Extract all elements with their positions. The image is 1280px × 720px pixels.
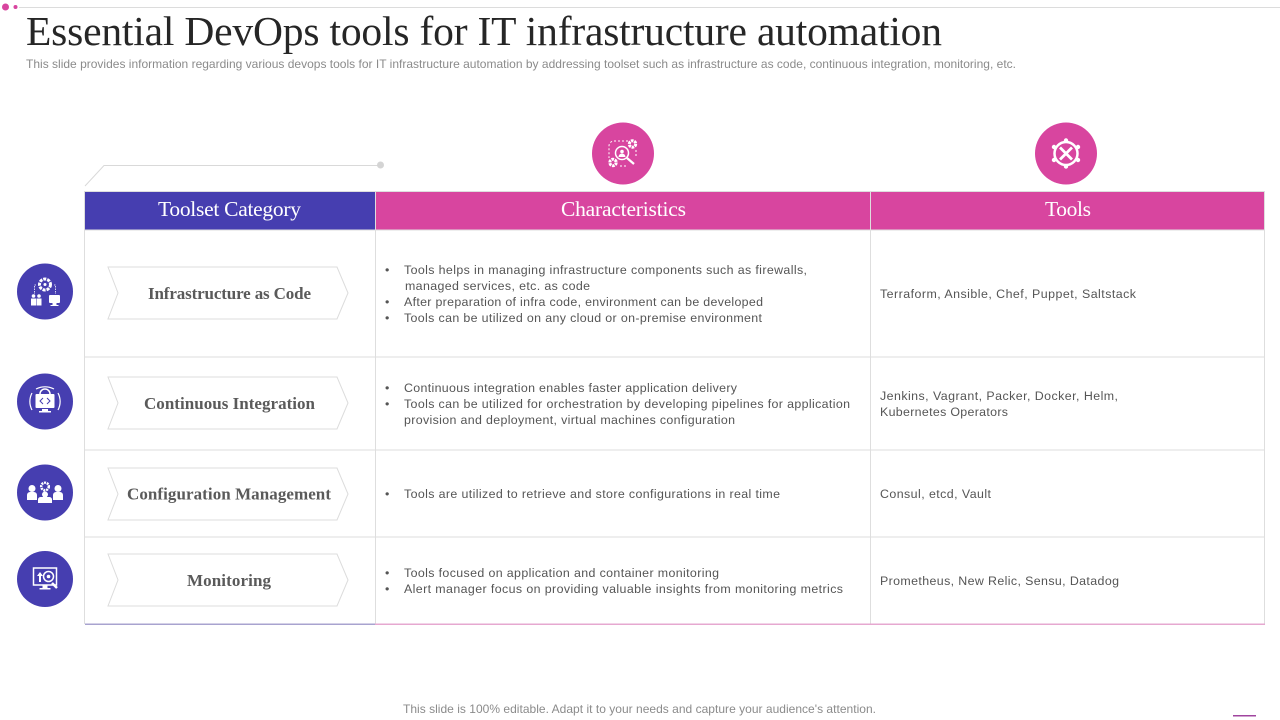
title: Essential DevOps tools for IT infrastructure automation: [26, 8, 942, 54]
row 4 label: [108, 554, 348, 606]
row 2: continuous integration: [17, 374, 1118, 430]
row 1 characteristics: After preparation of infra code, environment can be developed: [404, 295, 763, 309]
row 4 characteristics: •: [385, 582, 389, 596]
row 2 tools: Jenkins, Vagrant, Packer, Docker, Helm,: [880, 389, 1118, 403]
table grid: [84, 191, 1264, 624]
row 3 characteristics: •: [385, 487, 389, 501]
row 1 characteristics: •: [385, 311, 389, 325]
row 1 characteristics: •: [385, 295, 389, 309]
icon: characteristics: [592, 122, 654, 184]
row 4 tools: Prometheus, New Relic, Sensu, Datadog: [880, 574, 1119, 588]
row 1 characteristics: Tools can be utilized on any cloud or on-premise environment: [404, 311, 763, 325]
row 2 tools: [880, 389, 1118, 419]
row 4 characteristics: Alert manager focus on providing valuable insights from monitoring metrics: [404, 582, 843, 596]
row 1: infrastructure as code: [17, 263, 1137, 325]
row 2 characteristics: provision and deployment, virtual machines configuration: [404, 413, 735, 427]
row 3 tools: Consul, etcd, Vault: [880, 487, 992, 501]
row 4 characteristics: •: [385, 566, 389, 580]
row 1 label: [108, 267, 348, 319]
row 2 characteristics: •: [385, 397, 389, 411]
table header: tools: [871, 192, 1264, 230]
icon: tools: [1035, 122, 1097, 184]
row 3 label: Configuration Management: [127, 484, 331, 504]
row 4 characteristics: [385, 566, 843, 596]
row 4 label: Monitoring: [187, 571, 272, 590]
table header: characteristics: Characteristics: [561, 197, 686, 221]
row 2 tools: Kubernetes Operators: [880, 405, 1008, 419]
row 2 characteristics: •: [385, 381, 389, 395]
table header: characteristics: [376, 192, 870, 230]
row 1 characteristics: Tools helps in managing infrastructure components such as firewalls,: [404, 263, 807, 277]
row 2 characteristics: Continuous integration enables faster application delivery: [404, 381, 738, 395]
footer note: This slide is 100% editable. Adapt it to your needs and capture your audience's attention.: [403, 702, 876, 716]
row 3 label: [108, 468, 348, 520]
row 1 icon: [17, 264, 73, 320]
subtitle: This slide provides information regarding various devops tools for IT infrastructure automation by addressing toolset such as infrastructure as code, continuous integration, monitoring, etc.: [26, 57, 1016, 71]
table header: toolset category: [85, 192, 375, 230]
table header: tools: Tools: [1045, 197, 1091, 221]
table: [84, 191, 1265, 625]
row 2 characteristics: Tools can be utilized for orchestration by developing pipelines for application: [404, 397, 850, 411]
row 2 label: Continuous Integration: [144, 394, 316, 413]
row 1 characteristics: [385, 263, 807, 325]
row 4: monitoring: [17, 551, 1119, 607]
row 2 icon: [17, 374, 73, 430]
row 2 characteristics: [385, 381, 850, 427]
row 3 icon: [17, 464, 73, 520]
row 3: configuration management: [17, 464, 992, 520]
row 3 characteristics: Tools are utilized to retrieve and store configurations in real time: [404, 487, 780, 501]
connector line decoration: [85, 162, 384, 186]
row 2 label: [108, 377, 348, 429]
row 1 characteristics: managed services, etc. as code: [405, 279, 590, 293]
top decoration: [2, 4, 1280, 10]
row 1 label: Infrastructure as Code: [148, 284, 311, 303]
table bottom rule: [85, 624, 1265, 625]
row 4 characteristics: Tools focused on application and container monitoring: [404, 566, 719, 580]
row 4 icon: [17, 551, 73, 607]
footer mark: [1233, 715, 1256, 716]
row 1 tools: Terraform, Ansible, Chef, Puppet, Saltstack: [880, 287, 1137, 301]
row 1 characteristics: •: [385, 263, 389, 277]
table header: toolset category: Toolset Category: [158, 197, 301, 221]
